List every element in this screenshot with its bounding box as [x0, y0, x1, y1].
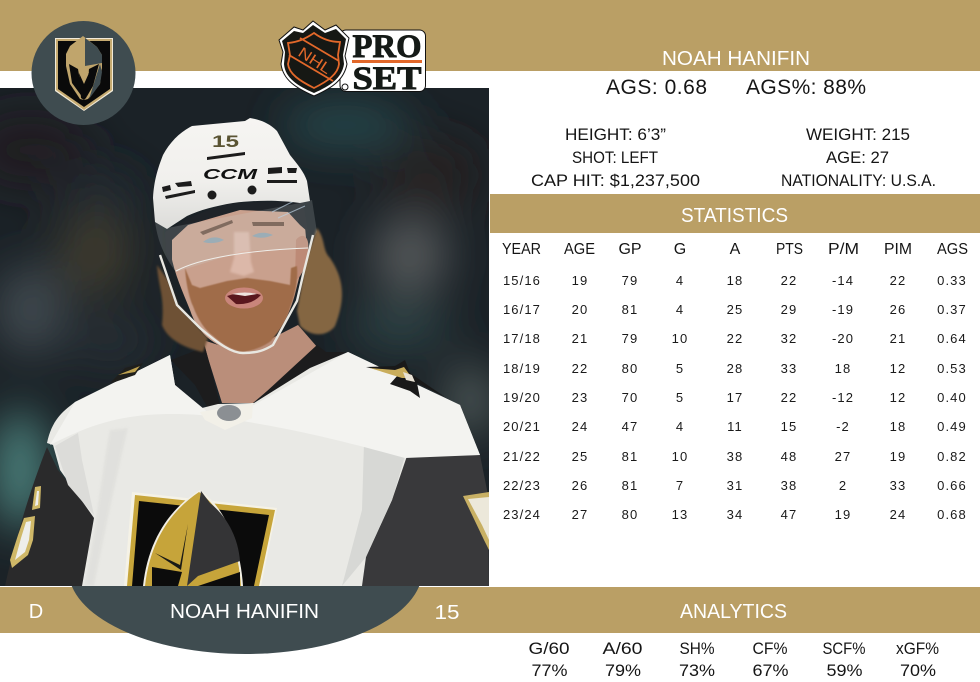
logo plate: [340, 30, 426, 92]
season 16/17: 16/17: [503, 302, 541, 317]
eyebrows: [200, 220, 233, 235]
jersey crest: [124, 490, 277, 586]
eyes: [203, 237, 224, 243]
player details right: AGE: 27: [826, 149, 889, 167]
season 17/18: 79: [622, 331, 638, 346]
SH%: [679, 640, 715, 680]
helmet vents: [162, 167, 297, 200]
player name heading: NOAH HANIFIN: [662, 47, 810, 70]
player details left: [531, 126, 700, 190]
table header: GP: [618, 241, 642, 258]
season 16/17: 0.37: [937, 302, 967, 317]
white jersey: [47, 352, 480, 586]
season 23/24: 34: [727, 507, 743, 522]
season 21/22: 25: [572, 449, 588, 464]
season 22/23: 22/23: [503, 478, 541, 493]
season 16/17: 20: [572, 302, 588, 317]
hair right: [297, 228, 342, 334]
season 23/24: 19: [835, 507, 851, 522]
table header: PIM: [884, 241, 912, 258]
season 20/21: 24: [572, 419, 588, 434]
season 18/19: 18/19: [503, 361, 541, 376]
NHL shield: NHL: [295, 44, 334, 78]
season 17/18: 21: [890, 331, 906, 346]
player details left: HEIGHT: 6’3”: [565, 126, 666, 144]
chin strap: [160, 235, 313, 353]
player details right: WEIGHT: 215: [806, 126, 910, 144]
season 17/18: 22: [727, 331, 743, 346]
table header: YEAR: [502, 241, 541, 258]
team logo badge: [32, 21, 136, 125]
season 23/24: [503, 507, 967, 522]
season 19/20: 23: [572, 390, 588, 405]
orange stripe: [352, 60, 422, 63]
season 20/21: 18: [890, 419, 906, 434]
xGF%: 70%: [900, 662, 936, 680]
helmet brand: CCM: [203, 166, 258, 183]
season 18/19: 22: [572, 361, 588, 376]
season 20/21: 11: [727, 419, 743, 434]
position label: D: [29, 601, 43, 623]
SCF%: [822, 640, 866, 680]
season 18/19: 12: [890, 361, 906, 376]
statistics band: STATISTICS: [681, 204, 788, 227]
season 17/18: 21: [572, 331, 588, 346]
shield: [55, 38, 113, 111]
season 21/22: 27: [835, 449, 851, 464]
PRO text: PRO: [352, 29, 422, 65]
season 18/19: 5: [676, 361, 684, 376]
right shoulder star patch: [366, 360, 445, 398]
white helmet: [153, 118, 310, 229]
helmet: [66, 36, 102, 100]
season 19/20: 70: [622, 390, 638, 405]
season 15/16: 79: [622, 273, 638, 288]
SET text: SET: [352, 61, 422, 97]
right sleeve: [362, 455, 489, 586]
top gold banner: [0, 0, 980, 71]
player details left: SHOT: LEFT: [572, 149, 658, 167]
G/60: G/60: [528, 640, 570, 658]
table header: P/M: [828, 241, 859, 258]
season 15/16: 4: [676, 273, 684, 288]
season 22/23: 2: [839, 478, 847, 493]
beard: [185, 266, 297, 352]
season 16/17: 29: [781, 302, 797, 317]
SCF%: 59%: [826, 662, 863, 680]
name plate label: NOAH HANIFIN: [170, 600, 319, 623]
player photo: [0, 88, 492, 586]
season 18/19: 33: [781, 361, 797, 376]
season 16/17: 25: [727, 302, 743, 317]
season 17/18: 17/18: [503, 331, 541, 346]
table header: PTS: [776, 241, 803, 258]
player details right: [781, 126, 936, 190]
season 22/23: 26: [572, 478, 588, 493]
right sleeve number: [463, 492, 489, 550]
statistics table: [502, 241, 968, 522]
season 16/17: 26: [890, 302, 906, 317]
season 15/16: 19: [572, 273, 588, 288]
season 23/24: 80: [622, 507, 638, 522]
collar: [171, 345, 347, 412]
season 21/22: 19: [890, 449, 906, 464]
season 23/24: 47: [781, 507, 797, 522]
season 21/22: 0.82: [937, 449, 967, 464]
season 23/24: 13: [672, 507, 688, 522]
season 23/24: 24: [890, 507, 906, 522]
SH%: SH%: [680, 640, 715, 658]
season 22/23: 7: [676, 478, 684, 493]
season 22/23: 81: [622, 478, 638, 493]
season 17/18: 0.64: [937, 331, 967, 346]
season 16/17: 81: [622, 302, 638, 317]
season 17/18: 32: [781, 331, 797, 346]
A/60: [602, 640, 642, 680]
CF%: [752, 640, 789, 680]
season 19/20: 12: [890, 390, 906, 405]
season 16/17: 4: [676, 302, 684, 317]
table header: G: [674, 241, 686, 258]
season 19/20: -12: [832, 390, 854, 405]
SH%: 73%: [679, 662, 715, 680]
player details left: CAP HIT: $1,237,500: [531, 172, 700, 190]
season 18/19: 28: [727, 361, 743, 376]
season 16/17: [503, 302, 967, 317]
season 23/24: 0.68: [937, 507, 967, 522]
table header: A: [730, 241, 741, 258]
left shoulder patch: [110, 363, 143, 383]
jersey yoke shading: [50, 352, 480, 458]
visor edge: [176, 248, 308, 271]
season 18/19: 0.53: [937, 361, 967, 376]
season 20/21: 0.49: [937, 419, 967, 434]
player details right: NATIONALITY: U.S.A.: [781, 172, 936, 190]
NHL shield: [279, 21, 349, 96]
xGF%: [896, 640, 939, 680]
season 17/18: [503, 331, 967, 346]
analytics heading: ANALYTICS: [680, 600, 787, 623]
season 20/21: 15: [781, 419, 797, 434]
xGF%: xGF%: [896, 640, 939, 658]
season 21/22: 38: [727, 449, 743, 464]
season 18/19: 18: [835, 361, 851, 376]
AGS headline: AGS: 0.68: [606, 76, 707, 99]
season 17/18: -20: [832, 331, 854, 346]
season 16/17: -19: [832, 302, 854, 317]
season 19/20: 0.40: [937, 390, 967, 405]
A/60: 79%: [605, 662, 641, 680]
season 22/23: 0.66: [937, 478, 967, 493]
dark visor band: [168, 203, 306, 260]
bottom gold band: [0, 587, 980, 633]
nose: [230, 232, 254, 276]
season 17/18: 10: [672, 331, 688, 346]
G/60: [528, 640, 570, 680]
season 19/20: 5: [676, 390, 684, 405]
season 23/24: 23/24: [503, 507, 541, 522]
left sleeve number: [10, 486, 41, 568]
season 20/21: -2: [836, 419, 850, 434]
season 19/20: 22: [781, 390, 797, 405]
neck: [203, 325, 318, 403]
season 20/21: 47: [622, 419, 638, 434]
table header: AGS: [937, 241, 968, 258]
SCF%: SCF%: [822, 640, 866, 658]
statistics band: [490, 194, 980, 233]
season 15/16: 0.33: [937, 273, 967, 288]
season 19/20: 17: [727, 390, 743, 405]
ear: [295, 236, 308, 280]
CF%: 67%: [752, 662, 789, 680]
face: [168, 203, 306, 352]
jersey mesh side panels: [342, 443, 405, 586]
table header: [502, 241, 968, 258]
A/60: A/60: [602, 640, 642, 658]
collar patch with NHL crest: [200, 403, 253, 430]
season 20/21: [503, 419, 967, 434]
season 22/23: 31: [727, 478, 743, 493]
season 21/22: 10: [672, 449, 688, 464]
season 19/20: [503, 390, 967, 405]
season 15/16: [503, 273, 967, 288]
season 22/23: 33: [890, 478, 906, 493]
season 15/16: -14: [832, 273, 854, 288]
name plate ellipse: [72, 586, 420, 654]
season 21/22: 48: [781, 449, 797, 464]
season 21/22: 21/22: [503, 449, 541, 464]
jersey number: 15: [434, 602, 460, 624]
season 18/19: [503, 361, 967, 376]
visor: [155, 200, 317, 272]
season 22/23: 38: [781, 478, 797, 493]
table header: AGE: [564, 241, 595, 258]
G/60: 77%: [532, 662, 568, 680]
AGS percent headline: AGS%: 88%: [746, 76, 866, 99]
season 15/16: 15/16: [503, 273, 541, 288]
season 20/21: 4: [676, 419, 684, 434]
season 23/24: 27: [572, 507, 588, 522]
season 18/19: 80: [622, 361, 638, 376]
hair left: [157, 265, 208, 352]
analytics percentiles: [528, 640, 939, 680]
mouth: [225, 288, 263, 308]
season 20/21: 20/21: [503, 419, 541, 434]
CF%: CF%: [752, 640, 788, 658]
helmet vent: [207, 152, 245, 160]
season 21/22: [503, 449, 967, 464]
left sleeve: [5, 447, 96, 586]
season 15/16: 22: [890, 273, 906, 288]
season 15/16: 18: [727, 273, 743, 288]
helmet number: 15: [212, 132, 239, 151]
season 22/23: [503, 478, 967, 493]
season 21/22: 81: [622, 449, 638, 464]
season 19/20: 19/20: [503, 390, 541, 405]
season 15/16: 22: [781, 273, 797, 288]
Pro Set NHL logo: [279, 21, 426, 97]
